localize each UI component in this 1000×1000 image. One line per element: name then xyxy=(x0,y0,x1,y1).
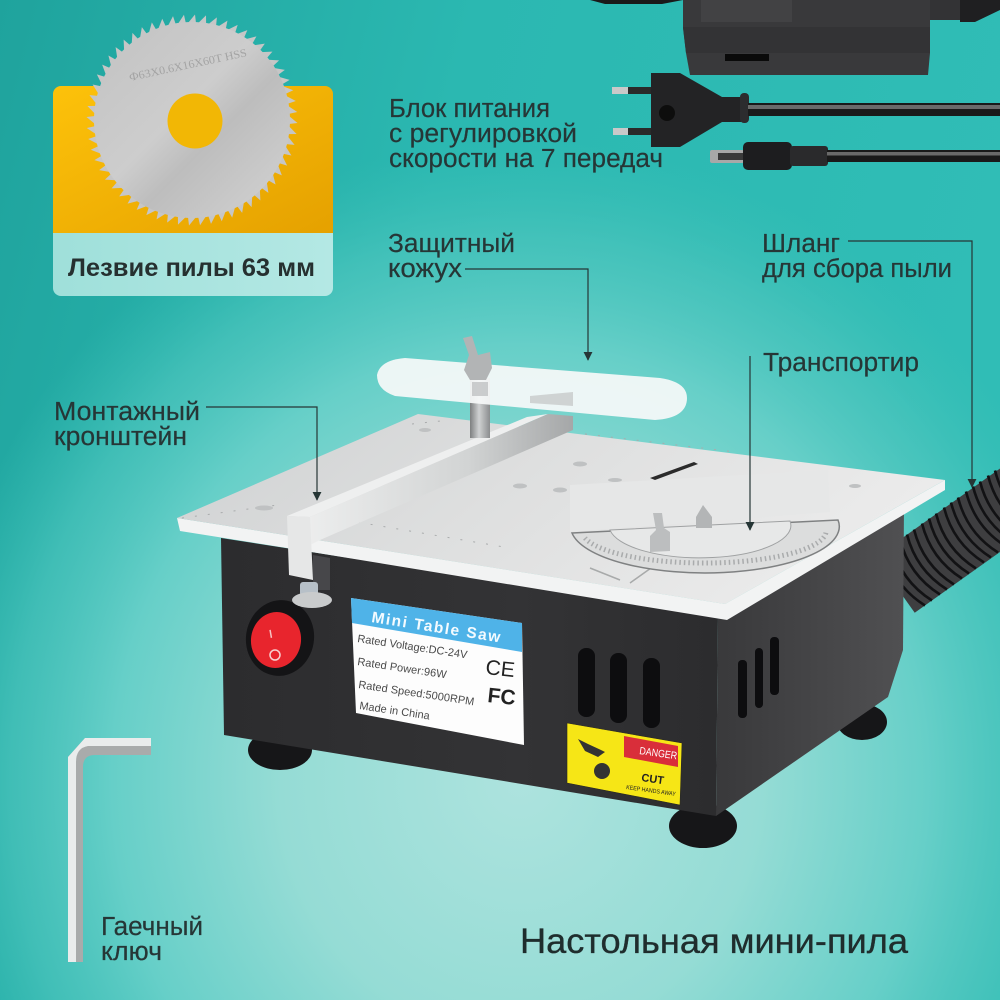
icon: mains plug xyxy=(612,73,1000,147)
scale arc xyxy=(572,520,839,573)
danger sticker: KEEP HANDS AWAY xyxy=(626,785,676,798)
side vents xyxy=(738,637,779,718)
icon: saw blade: Ф63X0.6X16X60T HSS xyxy=(128,47,248,84)
blade slot xyxy=(650,462,698,480)
thumb screw xyxy=(300,582,318,596)
mitre slot xyxy=(590,558,665,583)
spec label xyxy=(351,598,524,745)
danger sticker: DANGER xyxy=(639,745,678,762)
bracket post xyxy=(287,516,313,580)
table top xyxy=(177,414,945,620)
callout: mounting bracket: Монтажный xyxy=(54,398,200,426)
protective guard xyxy=(377,336,687,438)
callout: protective cover: Защитный xyxy=(388,230,515,258)
callout: mounting bracket xyxy=(54,398,317,500)
inner disc xyxy=(610,521,791,558)
power supply label xyxy=(389,95,663,173)
guard post xyxy=(470,378,490,438)
callout: dust hose xyxy=(762,230,972,487)
danger sticker: CUT xyxy=(641,772,665,787)
front vents xyxy=(578,648,660,728)
callout: mounting bracket: кронштейн xyxy=(54,423,187,451)
saw body xyxy=(221,505,904,848)
spec label: CE xyxy=(484,656,516,682)
callout: dust hose: для сбора пыли xyxy=(762,255,952,283)
icon: saw blade xyxy=(74,2,310,238)
fence plate xyxy=(570,470,830,532)
hex nut xyxy=(696,505,712,528)
protractor xyxy=(570,470,839,573)
callout: protective cover: кожух xyxy=(388,255,462,283)
callout: protective cover xyxy=(388,230,588,360)
icon: rubber feet xyxy=(248,704,887,848)
callout: protractor: Транспортир xyxy=(763,349,919,377)
callout: dust hose: Шланг xyxy=(762,230,840,258)
spec label: Rated Voltage:DC-24V xyxy=(357,633,469,661)
post through cover xyxy=(472,382,488,396)
acrylic shade xyxy=(530,392,573,406)
table edge xyxy=(177,480,945,620)
body front xyxy=(221,538,718,816)
mounting bracket and fence xyxy=(287,414,573,608)
callout: wrench: ключ xyxy=(101,938,162,966)
acrylic cover xyxy=(377,358,687,420)
fence rail top xyxy=(287,414,548,517)
icon: power switch xyxy=(240,595,320,681)
icon: DC jack xyxy=(710,142,1000,170)
mounting holes xyxy=(255,428,861,510)
wing bolt xyxy=(650,513,670,552)
fence rail face xyxy=(310,414,573,545)
title: Настольная мини-пила xyxy=(520,921,908,961)
spec label: FC xyxy=(486,684,517,710)
card caption: Лезвие пилы 63 мм xyxy=(68,254,315,282)
power supply block xyxy=(389,0,1000,173)
callout: wrench xyxy=(101,913,203,966)
bracket shadow xyxy=(313,555,330,590)
adapter box xyxy=(590,0,1000,75)
ruler marks xyxy=(182,420,735,548)
spec label: Mini Table Saw xyxy=(370,609,502,646)
danger sticker xyxy=(567,723,682,805)
table surface xyxy=(177,414,945,604)
body side xyxy=(716,505,904,816)
spec label: Rated Power:96W xyxy=(357,656,448,681)
spec label: Rated Speed:5000RPM xyxy=(358,679,475,708)
degree ticks xyxy=(585,532,826,563)
callout: wrench: Гаечный xyxy=(101,913,203,941)
icon: hex wrench xyxy=(68,738,151,962)
card pale bottom xyxy=(53,233,333,296)
power supply label: с регулировкой xyxy=(389,120,577,148)
wing nut xyxy=(463,336,492,380)
spec label: Made in China xyxy=(359,700,431,723)
panel: saw blade card xyxy=(53,2,333,296)
card yellow top xyxy=(53,86,333,233)
power supply label: Блок питания xyxy=(389,95,550,123)
icon: dust hose xyxy=(885,466,1000,606)
power supply label: скорости на 7 передач xyxy=(389,145,663,173)
